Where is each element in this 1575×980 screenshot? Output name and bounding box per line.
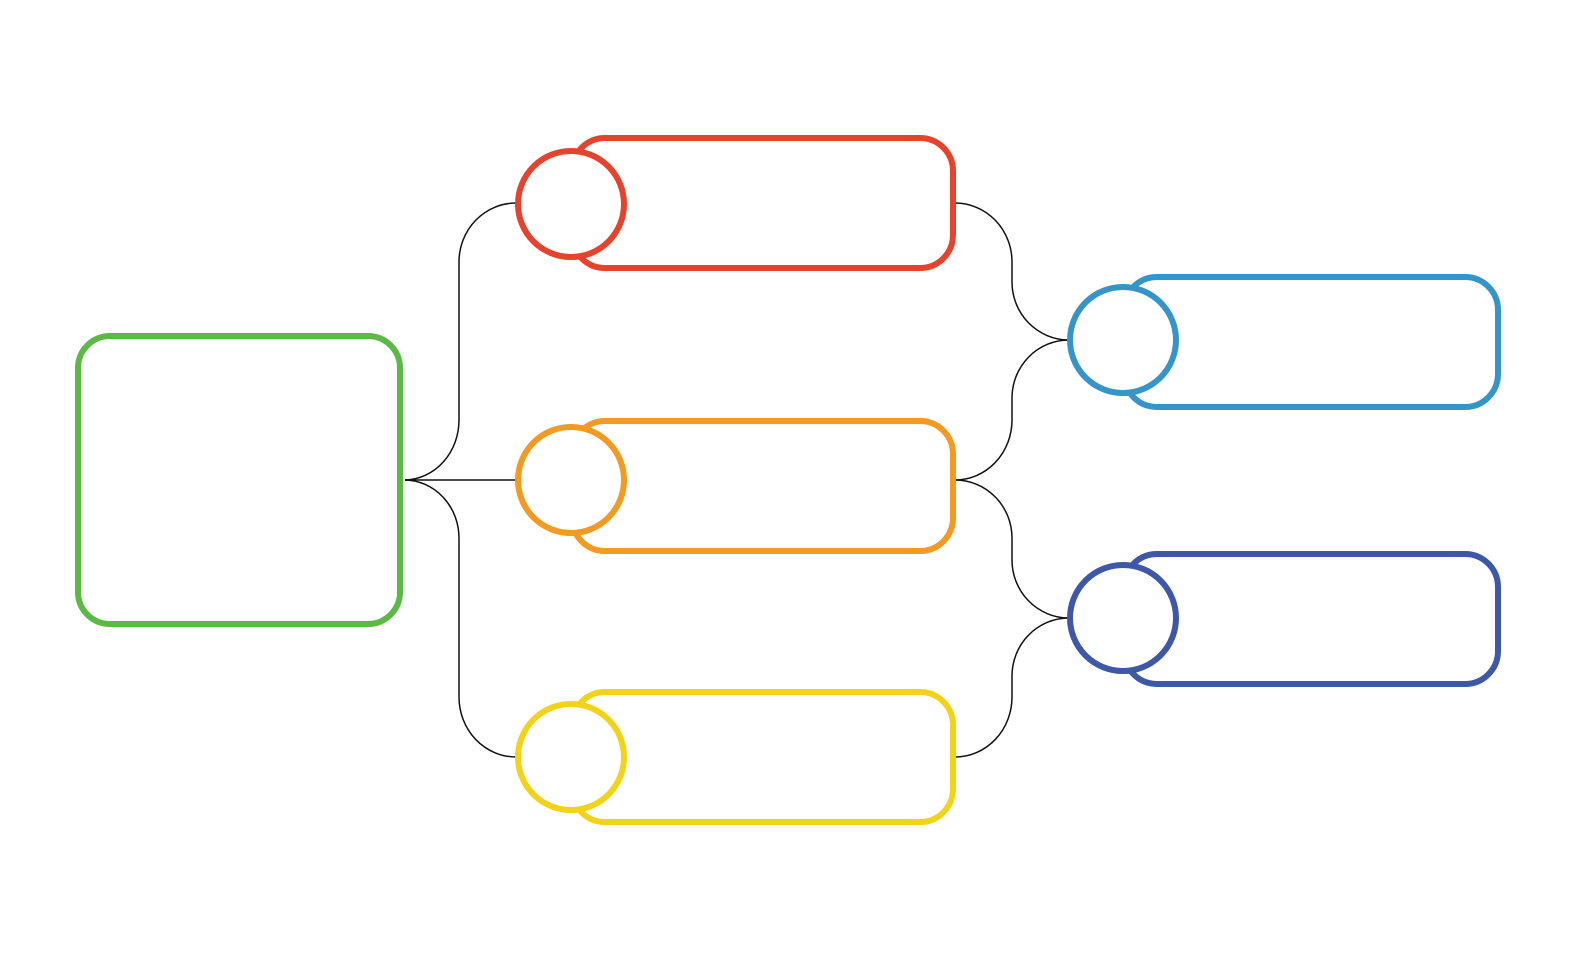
panel: blue [1070,277,1498,407]
connectors right [955,203,1068,757]
panel: yellow [518,692,953,822]
panel: red [518,138,953,268]
panel: orange [518,421,953,551]
panel: navy [1070,554,1498,684]
panel: main green box [78,336,400,624]
connectors left [405,203,516,757]
